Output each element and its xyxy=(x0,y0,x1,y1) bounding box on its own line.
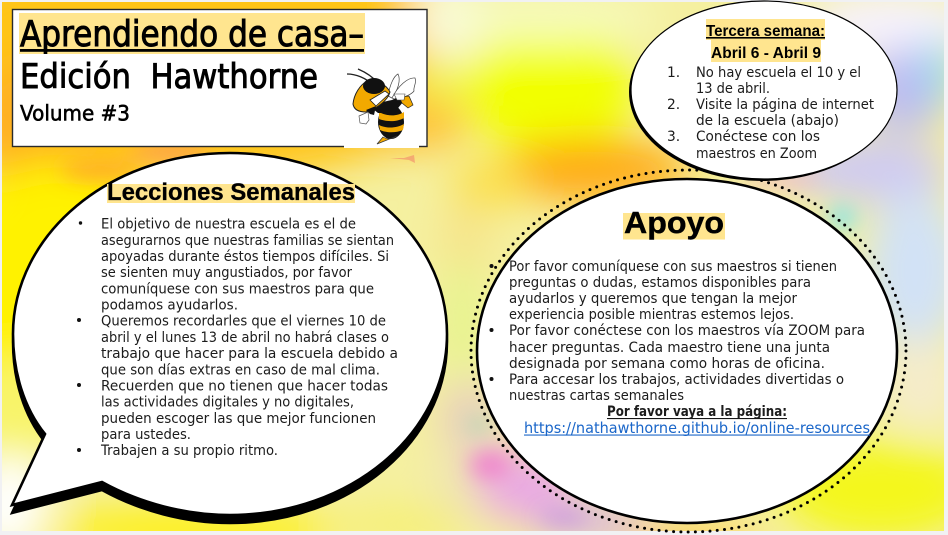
dotted outer ring xyxy=(471,170,906,532)
bullet list: support: experiencia posible mientras estemos lejos. xyxy=(509,307,794,323)
numbered list: 1. xyxy=(667,65,680,81)
panel: Tercera semana oval xyxy=(629,1,897,181)
heading: Tercera semana: Tercera semana: xyxy=(706,23,825,40)
link: https://nathawthorne.github.io/online-resources xyxy=(524,419,870,437)
numbered list: 3. xyxy=(667,129,680,145)
numbered list: de la escuela (abajo) xyxy=(696,113,839,129)
heading highlights xyxy=(706,19,825,62)
bullet list: lessons: las actividades digitales y no digitales, xyxy=(101,394,354,410)
bullet list: lessons: Recuerden que no tienen que hacer todas xyxy=(101,378,388,394)
dates: Abril 6 - Abril 9 xyxy=(711,45,821,62)
heading highlight xyxy=(107,184,355,203)
bullet list: lessons: se sienten muy angustiados, por favor xyxy=(101,265,352,281)
volume label: Volume #3 xyxy=(20,102,130,126)
bullet list: lessons: podamos ayudarlos. xyxy=(101,297,238,313)
heading: Lecciones Semanales: Lecciones Semanales xyxy=(107,179,355,206)
heading: Apoyo: Apoyo xyxy=(624,205,724,240)
speech bubble shape xyxy=(12,153,447,515)
bullet list: lessons: Queremos recordarles que el viernes 10 de xyxy=(101,313,386,329)
panel: speech bubble Lecciones Semanales xyxy=(12,153,447,523)
call to action: Por favor vaya a la página: xyxy=(607,404,787,420)
bullet list: support: Por favor conéctese con los maestros vía ZOOM para xyxy=(509,323,865,339)
numbered list: 13 de abril. xyxy=(696,81,770,97)
bullet list: lessons xyxy=(77,216,398,459)
bullet list: support: Para accesar los trabajos, actividades divertidas o xyxy=(509,372,844,388)
numbered list: No hay escuela el 10 y el xyxy=(696,65,861,81)
bullet list: support: designada por semana como horas de oficina. xyxy=(509,356,825,372)
numbered list: Conéctese con los xyxy=(696,129,820,145)
bullet list: support xyxy=(490,259,865,404)
bullet list: lessons: trabajo que hacer para la escuela debido a xyxy=(101,346,398,362)
bullet list: lessons: que son días extras en caso de mal clima. xyxy=(101,362,380,378)
numbered list: maestros en Zoom xyxy=(696,146,817,162)
bullet list: lessons: comuníquese con sus maestros para que xyxy=(101,281,374,297)
bullet list: support: Por favor comuníquese con sus maestros si tienen xyxy=(509,259,837,275)
oval shadow xyxy=(629,3,895,181)
bullet list: lessons: apoyadas durante éstos tiempos difíciles. Si xyxy=(101,249,389,265)
bullet list: support: hacer preguntas. Cada maestro tiene una junta xyxy=(509,340,830,356)
bullet list: support: preguntas o dudas, estamos disponibles para xyxy=(509,275,811,291)
bullet list: support: nuestras cartas semanales xyxy=(509,388,684,404)
title highlight xyxy=(19,13,365,54)
bullet list: lessons: abril y el lunes 13 de abril no habrá clases o xyxy=(101,330,389,346)
numbered list: Visite la página de internet xyxy=(696,97,875,113)
speech bubble shadow xyxy=(12,161,447,523)
title box xyxy=(12,10,427,148)
bullet list: lessons: Trabajen a su propio ritmo. xyxy=(100,443,278,459)
bullet list: lessons: El objetivo de nuestra escuela es el de xyxy=(101,216,356,232)
icon: hornet mascot xyxy=(347,69,416,144)
numbered list xyxy=(667,65,875,162)
bullet list: support: ayudarlos y queremos que tengan la mejor xyxy=(509,291,797,307)
panel: Apoyo oval xyxy=(471,170,906,532)
bullet list: lessons: para ustedes. xyxy=(101,427,191,443)
title underline xyxy=(20,49,364,52)
bullet list: lessons: pueden escoger las que mejor funcionen xyxy=(101,411,376,427)
heading highlight xyxy=(623,213,725,240)
subtitle: Edición Hawthorne: Edición Hawthorne xyxy=(20,57,318,96)
numbered list: 2. xyxy=(667,97,680,113)
white oval xyxy=(631,1,897,179)
bullet list: lessons: asegurarnos que nuestras familias se sientan xyxy=(101,233,394,249)
title: Aprendiendo de casa: Aprendiendo de casa– xyxy=(20,14,364,55)
white oval xyxy=(477,179,897,523)
